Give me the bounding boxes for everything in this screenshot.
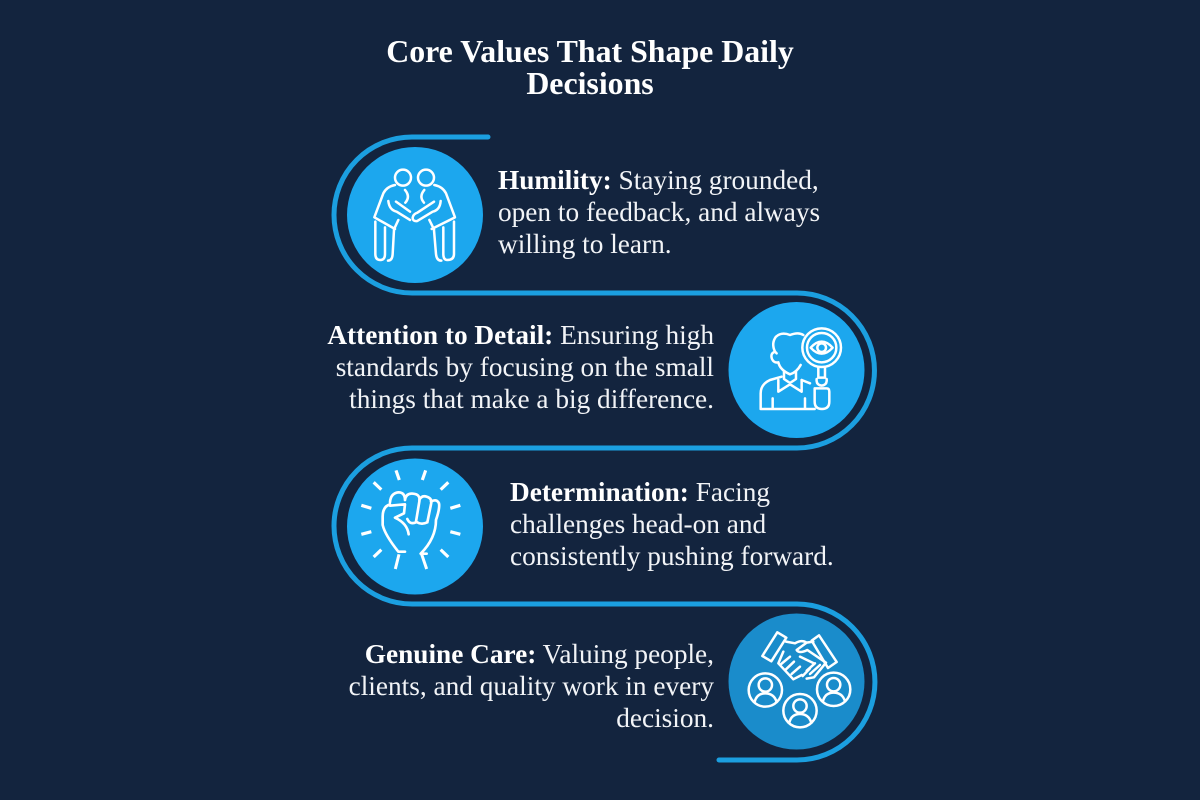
text: Humility [498,165,820,259]
text: Attention to Detail [327,320,714,414]
icon: two people bowing [347,147,483,283]
serpentine connector line [334,137,875,760]
text: Determination: Determination: Facing [510,477,770,507]
text: Genuine Care: decision. [616,703,714,733]
icon: raised fist [347,458,483,594]
text: Determination: consistently pushing forward. [510,541,834,571]
title: Core Values That Shape Daily [386,34,794,69]
title: Decisions [526,66,654,101]
text: Attention to Detail: Attention to Detail: Ensuring high [327,320,714,350]
icon: man with magnifying glass [728,302,864,438]
text: Humility: Humility: Staying grounded, [498,165,819,195]
text: Humility: willing to learn. [498,229,672,259]
text: Humility: open to feedback, and always [498,197,820,227]
text: Genuine Care: Genuine Care: Valuing people, [365,639,714,669]
text: Genuine Care: clients, and quality work in every [349,671,714,701]
text: Attention to Detail: standards by focusing on the small [336,352,714,382]
text: Determination: challenges head-on and [510,509,766,539]
text: Determination [510,477,834,571]
text: Attention to Detail: things that make a big difference. [349,384,714,414]
text: Genuine Care [349,639,714,733]
icon: handshake with three people [728,614,864,750]
title [386,34,794,101]
